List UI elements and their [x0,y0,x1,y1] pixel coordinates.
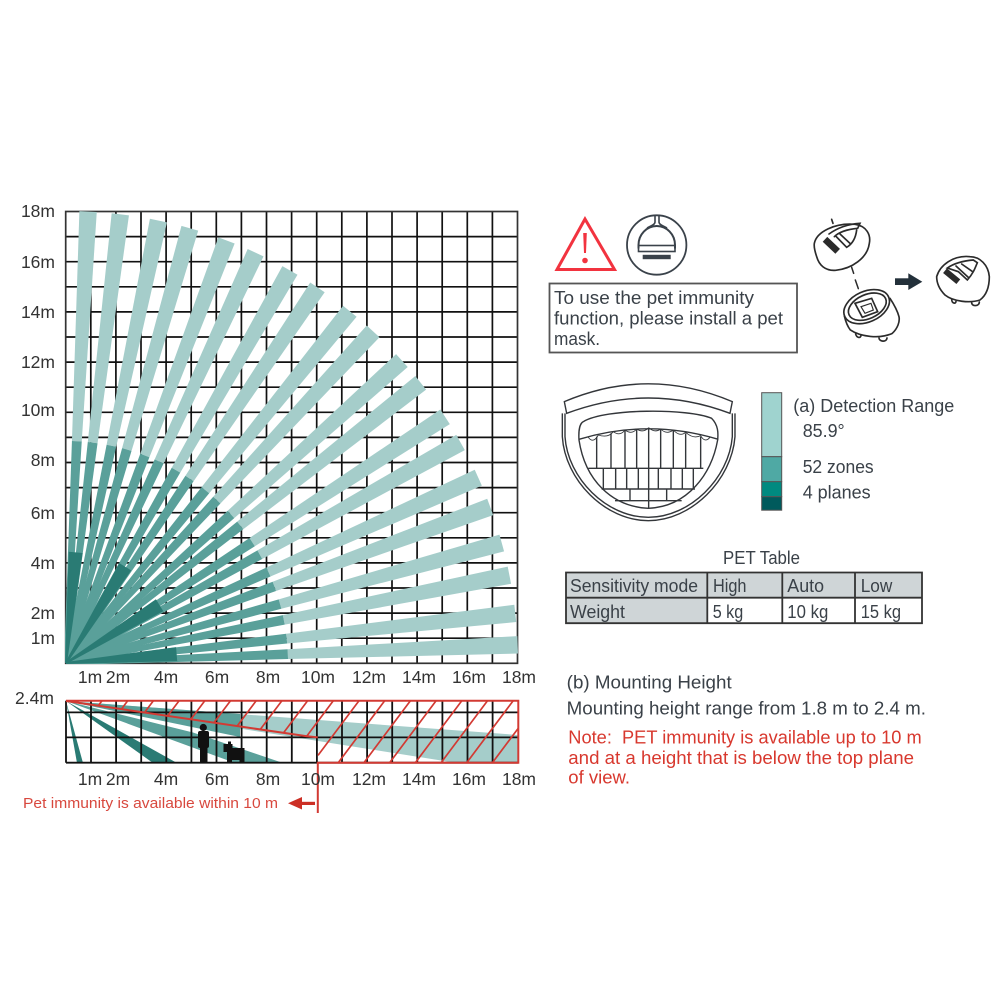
x axis labels: 10m [301,769,335,789]
icon: person [198,724,209,763]
text block: mounting height: (b) Mounting Height [567,672,732,692]
x axis labels: 18m [502,769,536,789]
x axis labels: 12m [352,667,386,687]
height label: 2.4m [15,688,54,708]
x axis labels: 8m [256,667,280,687]
table: PET sensitivity and weight: 5 kg [713,602,743,622]
table: PET sensitivity and weight: Weight [570,602,625,622]
y axis labels: 14m [21,302,55,322]
icon: dog [224,742,244,763]
illustration: detector lens front view [562,384,735,521]
note: pet immunity limits: Note: PET immunity is available up to 10 m [568,728,922,748]
note: pet immunity limits [568,728,922,788]
callout: install a pet mask: mask. [554,329,600,349]
y axis labels [21,201,55,648]
callout: install a pet mask: To use the pet immunity [554,288,754,308]
x axis labels: 8m [256,769,280,789]
red hatched no-pet zone [66,701,518,813]
legend text: detection range: (a) Detection Range [793,396,954,416]
table: PET sensitivity and weight: Auto [787,576,824,596]
table: PET sensitivity and weight [566,572,922,623]
x axis labels: 14m [402,667,436,687]
y axis labels: 1m [31,628,55,648]
mask base [839,283,899,341]
x axis labels: 1m [78,769,102,789]
icon: warning triangle [557,219,614,270]
dashed alignment line [852,267,858,289]
x axis labels [78,667,536,687]
table: PET sensitivity and weight: High [713,576,746,596]
y axis labels: 10m [21,400,55,420]
note: pet immunity limits: and at a height that is below the top plane [568,748,914,768]
detector cap [814,219,870,270]
x axis labels: 2m [106,769,130,789]
y axis labels: 8m [31,450,55,470]
y axis labels: 12m [21,352,55,372]
note: pet immunity limits: of view. [568,768,630,788]
x axis labels: 16m [452,769,486,789]
grid: 18m by 18m [66,212,517,663]
x axis labels: 6m [205,667,229,687]
y axis labels: 6m [31,503,55,523]
chart: side-view mounting height [15,688,536,813]
legend text: detection range: 85.9° [803,421,845,441]
side-view beams [66,701,518,763]
x axis labels: 10m [301,667,335,687]
y axis labels: 2m [31,603,55,623]
arrow: left [288,797,315,810]
legend: colour scale [762,393,782,510]
legend text: detection range: 4 planes [803,482,871,502]
x axis labels: 16m [452,667,486,687]
x axis labels: 18m [502,667,536,687]
detection rays fan [57,211,518,672]
legend text: detection range [793,396,954,502]
table: PET sensitivity and weight: 10 kg [787,602,828,622]
text block: mounting height: Mounting height range from 1.8 m to 2.4 m. [567,698,926,718]
x axis labels: 4m [154,769,178,789]
y axis labels: 16m [21,252,55,272]
x axis labels: 6m [205,769,229,789]
x axis labels: 14m [402,769,436,789]
illustration: assembled detector [937,256,989,306]
arrow: right [895,273,922,290]
x axis labels: 2m [106,667,130,687]
illustration: mask being fitted onto lens [814,219,899,341]
table: PET sensitivity and weight: 15 kg [861,602,901,622]
legend text: detection range: 52 zones [803,457,874,477]
callout: install a pet mask [550,284,797,352]
x axis labels: 12m [352,769,386,789]
x axis labels [78,769,536,789]
table: PET sensitivity and weight: Sensitivity mode [570,576,698,596]
icon: detector with mask [627,215,686,275]
text block: mounting height [567,672,926,718]
y axis labels: 4m [31,553,55,573]
x axis labels: 1m [78,667,102,687]
x axis labels: 4m [154,667,178,687]
pet immunity range note: Pet immunity is available within 10 m [23,796,278,812]
side-view grid [66,701,518,763]
y axis labels: 18m [21,201,55,221]
chart: top-view detection range [21,201,536,687]
callout: install a pet mask: function, please install a pet [554,308,783,328]
heading: PET table: PET Table [723,548,800,568]
table: PET sensitivity and weight: Low [861,576,893,596]
